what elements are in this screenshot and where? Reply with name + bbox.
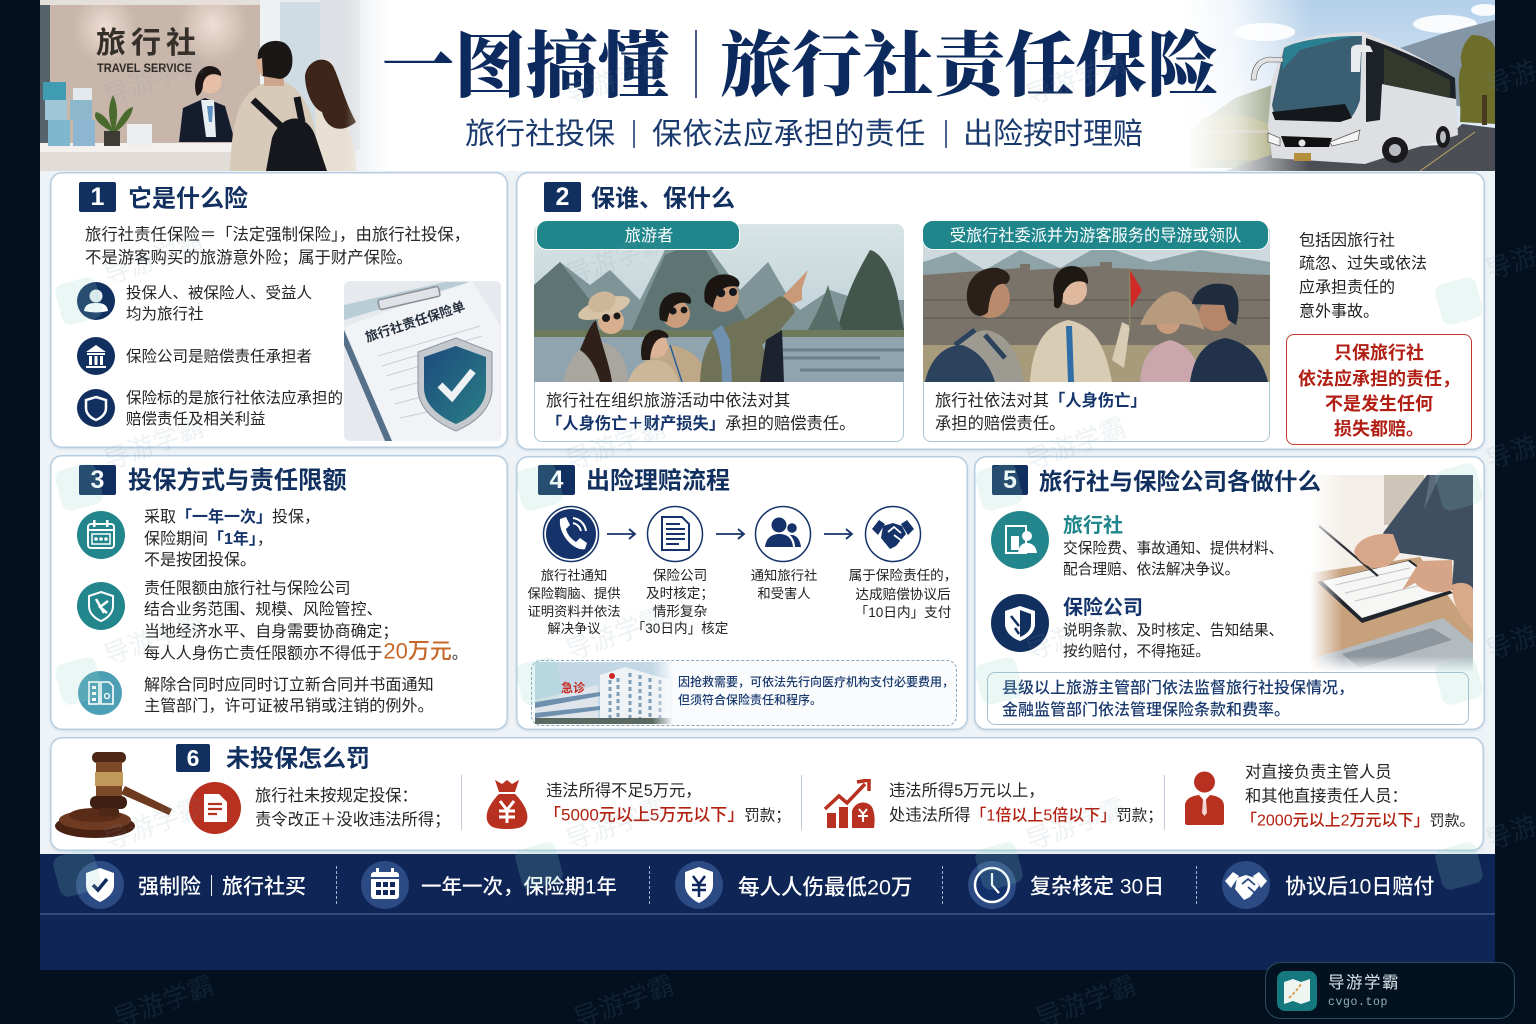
footer text: 30 days: 复杂核定 30日 xyxy=(1030,876,1164,898)
text: annual purchase: 采取「一年一次」投保， xyxy=(144,509,320,526)
text: contract termination xyxy=(144,676,434,714)
lead man pointing xyxy=(700,296,795,382)
card: tourists xyxy=(534,224,904,442)
text: tourists xyxy=(546,392,855,432)
icon: calendar xyxy=(77,511,125,559)
title xyxy=(382,27,1218,107)
watermark overlay: 导游学霸 xyxy=(562,602,670,666)
text: guides xyxy=(935,392,1147,432)
step 3 text xyxy=(751,568,817,601)
step 1 text: 证明资料并依法 xyxy=(527,604,621,619)
text: annual purchase: 不是按团投保。 xyxy=(144,552,256,569)
regulators text: 金融监管部门依法管理保险条款和费率。 xyxy=(1002,702,1290,719)
icon: rising chart xyxy=(823,779,877,829)
step 4 text: 达成赔偿协议后 xyxy=(855,586,951,602)
badge 3: 3 xyxy=(91,466,104,494)
step 2 text xyxy=(632,568,728,636)
text: subject matter: 赔偿责任及相关利益 xyxy=(126,410,266,428)
text: individuals: 和其他直接责任人员： xyxy=(1245,788,1408,806)
badge 4 xyxy=(538,465,575,495)
step 1 text: 旅行社通知 xyxy=(541,568,607,583)
card: guides xyxy=(923,224,1270,442)
step 4 text: 属于保险责任的， xyxy=(849,568,957,583)
watermark overlay: 导游学霸 xyxy=(562,412,670,476)
fade to white xyxy=(345,0,390,171)
text: over 50k xyxy=(889,777,1164,827)
footer text: minimum limit: 每人人伤最低20万 xyxy=(738,876,912,900)
step 2 text: 「30日内」核定 xyxy=(632,621,728,636)
text: policyholder: 投保人、被保险人、受益人 xyxy=(126,284,312,302)
badge 6 xyxy=(176,744,210,772)
heading: 投保方式与责任限额 xyxy=(128,468,347,494)
panel: responsibilities of each party xyxy=(974,456,1485,730)
text: agency duties xyxy=(1063,514,1283,578)
text: emergency note: 因抢救需要，可依法先行向医疗机构支付必要费用， xyxy=(678,675,954,689)
icon: shield and tools xyxy=(77,582,125,630)
step 1 text xyxy=(527,568,621,636)
icon: agency xyxy=(991,511,1049,569)
callout: regulators xyxy=(987,672,1469,725)
text: scope xyxy=(1299,232,1427,320)
brand logo badge xyxy=(1265,962,1515,1019)
callout: emergency note xyxy=(531,660,957,726)
watermark overlay: 导游学霸 xyxy=(562,47,670,111)
text: liability limits: 当地经济水平、自身需要协商确定； xyxy=(144,624,398,640)
step 1 text: 保险鞫脑、提供 xyxy=(527,586,621,601)
icon: phone xyxy=(542,506,600,562)
text: individuals: 对直接负责主管人员 xyxy=(1245,764,1392,782)
woman visitor xyxy=(315,107,357,171)
illustration: gavel xyxy=(55,745,180,845)
arrow xyxy=(824,528,854,540)
photo: tourists at karst river xyxy=(534,224,904,382)
step 2 text: 情形复杂 xyxy=(653,604,707,619)
woman with hat xyxy=(563,342,628,382)
text: liability limits xyxy=(144,580,468,663)
label: agency: 旅行社 xyxy=(1063,515,1123,537)
brochure rack xyxy=(43,82,66,100)
footer text: compulsory: 强制险｜旅行社买 xyxy=(138,876,306,898)
icon: red document xyxy=(189,782,241,834)
photo: hospital: 急诊 xyxy=(561,680,585,695)
illustration: policy clipboard with shield: 旅行社责任保险单 xyxy=(363,298,467,345)
icon: handshake xyxy=(864,506,922,562)
footer icon: shield yuan xyxy=(675,861,723,909)
text: liability limits: 结合业务范围、规模、风险管控、 xyxy=(144,602,382,619)
subtitle xyxy=(465,118,1143,151)
watermark overlay: 导游学霸 xyxy=(100,607,208,671)
badge 5: 5 xyxy=(1003,466,1017,494)
icon: people xyxy=(754,506,812,562)
badge 2: 2 xyxy=(556,183,569,211)
watermark overlay: 导游学霸 xyxy=(1022,792,1130,856)
footer icon: shield check xyxy=(76,861,124,909)
text: subject matter xyxy=(126,390,343,428)
woman guide xyxy=(1030,320,1112,382)
footer icon: clock xyxy=(968,861,1016,909)
badge 3 xyxy=(79,465,116,495)
panel: what insurance it is xyxy=(50,172,508,448)
icon: money bag xyxy=(485,778,529,830)
text: annual purchase xyxy=(144,508,320,569)
callout: red warning: 不是发生任何 xyxy=(1325,394,1433,414)
text: individuals: 「2000元以上2万元以下」罚款。 xyxy=(1241,812,1475,830)
badge 1: 1 xyxy=(91,183,104,211)
text: policyholder: 均为旅行社 xyxy=(126,306,204,322)
text: liability limits: 每人人身伤亡责任限额亦不得低于20万元。 xyxy=(144,638,468,663)
panel: claims process xyxy=(516,456,968,730)
condition: 违法所得5万元以上， xyxy=(889,782,1045,800)
text: subject matter: 保险标的是旅行社依法应承担的 xyxy=(126,390,343,406)
definition text: 旅行社责任保险＝「法定强制保险」，由旅行社投保， xyxy=(85,226,470,244)
man visitor xyxy=(230,82,318,171)
subtitle: 保依法应承担的责任 xyxy=(652,118,926,151)
icon: responsible person xyxy=(1184,771,1225,825)
brand name: 导游学霸 xyxy=(1328,974,1400,992)
title: 旅行社责任保险 xyxy=(720,28,1218,106)
step 3 text: 通知旅行社 xyxy=(751,568,817,583)
header photo: tour bus on mountain road xyxy=(1196,0,1495,171)
header photo: travel agency reception: TRAVEL SERVICE xyxy=(97,63,192,75)
watermark overlay: 导游学霸 xyxy=(562,227,670,291)
footer text: annual: 一年一次，保险期1年 xyxy=(421,876,617,898)
arrow xyxy=(716,528,746,540)
child xyxy=(628,360,678,382)
text: scope: 应承担责任的 xyxy=(1299,280,1395,296)
receptionist xyxy=(179,98,234,142)
pill: tourists: 旅游者 xyxy=(625,227,673,245)
text: emergency note xyxy=(678,675,954,707)
heading: 它是什么险 xyxy=(128,186,248,212)
text: scope: 意外事故。 xyxy=(1299,303,1379,320)
text: liability limits: 责任限额由旅行社与保险公司 xyxy=(144,580,351,597)
watermark overlay: 导游学霸 xyxy=(1022,47,1130,111)
arrow xyxy=(607,528,636,540)
text: contract termination: 解除合同时应同时订立新合同并书面通知 xyxy=(144,676,434,694)
subtitle: 出险按时理赔 xyxy=(963,118,1143,151)
icon: shield xyxy=(77,389,115,427)
definition text xyxy=(85,226,470,266)
photo: signing documents xyxy=(1312,475,1473,670)
panel: penalties xyxy=(50,737,1484,851)
text: scope: 疏忽、过失或依法 xyxy=(1299,256,1427,273)
badge 6: 6 xyxy=(187,745,199,771)
text: scope: 包括因旅行社 xyxy=(1299,232,1395,249)
header photo: travel agency reception xyxy=(40,0,374,171)
duties list: insurer: 按约赔付，不得拖延。 xyxy=(1063,644,1210,660)
watermark overlay: 导游学霸 xyxy=(1022,412,1130,476)
step 2 text: 及时核定； xyxy=(646,586,714,601)
watermark overlay: 导游学霸 xyxy=(100,792,208,856)
watermark overlay: 导游学霸 xyxy=(562,792,670,856)
badge 1 xyxy=(79,182,116,212)
step 3 text: 和受害人 xyxy=(757,586,811,601)
definition text: 不是游客购买的旅游意外险；属于财产保险。 xyxy=(85,248,413,266)
text: tourists: 旅行社在组织旅游活动中依法对其 xyxy=(546,392,790,410)
fine: 「5000元以上5万元以下」罚款； xyxy=(544,806,791,824)
text: contract termination: 主管部门，许可证被吊销或注销的例外。 xyxy=(144,696,434,714)
step 4 text xyxy=(849,568,957,620)
second man xyxy=(636,345,708,382)
duties list: insurer: 说明条款、及时核定、告知结果、 xyxy=(1063,622,1283,638)
pill: guides xyxy=(922,220,1269,250)
duties list: agency: 交保险费、事故通知、提供材料、 xyxy=(1063,540,1283,556)
man with cap xyxy=(1190,338,1268,382)
footer text: 10 days: 协议后10日赔付 xyxy=(1285,876,1434,898)
step 4 text: 「10日内」支付 xyxy=(855,605,951,620)
callout: red warning: 只保旅行社 xyxy=(1334,343,1424,363)
watermark overlay: 导游学霸 xyxy=(100,227,208,291)
plant xyxy=(95,95,133,132)
divider xyxy=(801,775,802,830)
label: insurer: 保险公司 xyxy=(1063,597,1143,619)
step 2 text: 保险公司 xyxy=(653,568,707,583)
icon: bank xyxy=(77,337,115,375)
divider xyxy=(1164,775,1165,830)
pill: guides: 受旅行社委派并为游客服务的导游或领队 xyxy=(950,227,1241,245)
callout: red warning: 损失都赔。 xyxy=(1334,419,1424,439)
bus body xyxy=(1268,32,1458,164)
illustration: policy clipboard with shield xyxy=(344,281,501,441)
text: insurer duties xyxy=(1063,594,1303,662)
badge 4: 4 xyxy=(550,466,563,494)
subtitle: 旅行社投保 xyxy=(465,118,615,151)
photo: guide and team at ancient wall xyxy=(923,228,1270,382)
title: 一图搞懂 xyxy=(382,27,670,107)
icon: contract documents xyxy=(78,671,122,715)
panel: who and what is covered xyxy=(516,172,1485,450)
pill: tourists xyxy=(536,220,740,250)
regulators text: 县级以上旅游主管部门依法监督旅行社投保情况， xyxy=(1002,680,1354,697)
heading: 保谁、保什么 xyxy=(591,186,735,212)
icon: map logo xyxy=(1277,971,1317,1011)
text: policyholder xyxy=(126,284,312,322)
heading: 旅行社与保险公司各做什么 xyxy=(1039,468,1321,494)
watermark overlay: 导游学霸 xyxy=(100,47,208,111)
badge 5 xyxy=(992,465,1028,495)
heading: 未投保怎么罚 xyxy=(226,746,370,772)
text: individuals xyxy=(1245,760,1475,834)
panel: insurance method and limits xyxy=(50,455,508,730)
text: guides: 旅行社依法对其「人身伤亡」 xyxy=(935,392,1147,410)
watermark overlay: 导游学霸 xyxy=(1022,602,1130,666)
icon: document xyxy=(646,506,704,562)
text: order to correct: 责令改正＋没收违法所得； xyxy=(255,811,450,829)
fine: 处违法所得「1倍以上5倍以下」罚款； xyxy=(889,806,1163,824)
text: tourists: 「人身伤亡＋财产损失」承担的赔偿责任。 xyxy=(546,414,855,432)
photo: hospital xyxy=(535,662,672,724)
duties list: agency xyxy=(1063,540,1283,578)
footer band: key takeaways xyxy=(40,854,1495,970)
regulators text xyxy=(1002,678,1354,722)
brand url: cvgo.top xyxy=(1328,996,1388,1009)
man with backpack xyxy=(938,330,1024,382)
text: guides: 承担的赔偿责任。 xyxy=(935,414,1065,432)
woman with hat xyxy=(1140,340,1202,382)
text: order to correct xyxy=(255,784,450,832)
icon: person xyxy=(77,282,115,320)
condition: 违法所得不足5万元， xyxy=(546,782,702,800)
callout: red warning xyxy=(1286,334,1472,445)
heading: 出险理赔流程 xyxy=(586,468,730,494)
step 1 text: 解决争议 xyxy=(547,621,601,636)
duties list: insurer xyxy=(1063,620,1283,662)
text: order to correct: 旅行社未按规定投保： xyxy=(255,787,418,805)
header band xyxy=(40,0,1495,171)
text: annual purchase: 保险期间「1年」， xyxy=(144,530,273,547)
duties list: agency: 配合理赔、依法解决争议。 xyxy=(1063,562,1239,578)
footer icon: calendar xyxy=(361,861,409,909)
footer icon: handshake xyxy=(1222,861,1270,909)
reception desk xyxy=(40,143,340,171)
callout: red warning: 依法应承担的责任， xyxy=(1298,369,1460,389)
text: insurer: 保险公司是赔偿责任承担者 xyxy=(126,348,312,366)
text: emergency note: 但须符合保险责任和程序。 xyxy=(678,693,822,707)
icon: insurer shield xyxy=(991,594,1049,652)
divider xyxy=(461,775,462,830)
text: under 50k xyxy=(546,777,796,827)
header photo: travel agency reception: 旅行社 xyxy=(96,27,201,60)
watermark overlay: 导游学霸 xyxy=(100,412,208,476)
badge 2 xyxy=(544,182,581,212)
